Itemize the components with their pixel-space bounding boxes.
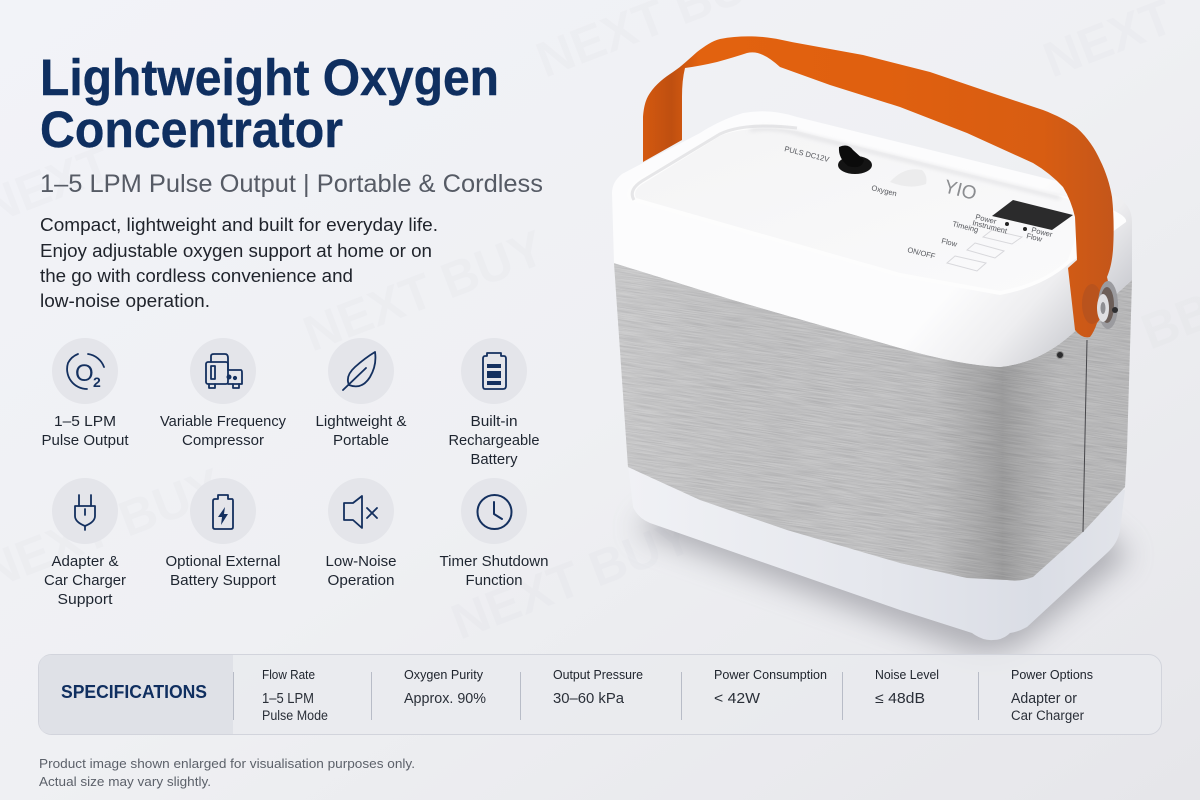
- spec: flow rate: [262, 667, 328, 723]
- spec: power options: Car Charger: [1011, 708, 1084, 723]
- title: Lightweight Oxygen: [40, 49, 499, 106]
- lid labels: [784, 144, 1054, 261]
- icon: oxygen: 2: [93, 374, 101, 390]
- icon: feather: [343, 352, 375, 390]
- footnote: Product image shown enlarged for visualisation purposes only.: [39, 756, 415, 771]
- feature: external battery: [166, 478, 280, 589]
- icon: plug: [75, 495, 95, 530]
- description: the go with cordless convenience and: [40, 266, 353, 286]
- lid labels: ON/OFF: [907, 245, 937, 261]
- feature: low noise: Operation: [328, 572, 394, 589]
- feature: low noise: [326, 478, 396, 589]
- feature: rechargeable battery: Rechargeable: [448, 432, 540, 449]
- specifications panel: [38, 654, 1162, 734]
- feature: external battery: Optional External: [166, 553, 280, 570]
- lid labels: Timeing: [952, 219, 979, 234]
- spec: flow rate: Flow Rate: [262, 667, 315, 682]
- spec: power consumption: < 42W: [714, 691, 760, 707]
- lid top: [627, 124, 1126, 295]
- product: oxygen concentrator: [612, 36, 1134, 654]
- strap rivet: [1082, 281, 1118, 329]
- description: Compact, lightweight and built for everyday life.: [40, 215, 438, 235]
- feature: compressor: [160, 338, 286, 449]
- spec: power options: Adapter or: [1011, 691, 1077, 707]
- icon: battery: [483, 353, 506, 389]
- footnote: [39, 756, 415, 789]
- product base: [628, 465, 1125, 640]
- description: low-noise operation.: [40, 291, 210, 311]
- footnote: Actual size may vary slightly.: [39, 774, 211, 789]
- carry handle: [643, 36, 1114, 337]
- feature: lightweight: Lightweight &: [316, 413, 406, 430]
- description: [40, 215, 438, 311]
- feature: timer: Timer Shutdown: [440, 553, 548, 570]
- lid labels: Power: [1031, 225, 1054, 239]
- feature: lightweight: Portable: [333, 432, 389, 449]
- feature: adapter and car charger: Car Charger: [44, 572, 126, 589]
- feature: adapter and car charger: Support: [58, 591, 113, 608]
- spec: output pressure: 30–60 kPa: [553, 691, 625, 707]
- icon: clock: [478, 495, 512, 529]
- icon: oxygen: O: [75, 360, 94, 387]
- feature: pulse output: 1–5 LPM: [54, 413, 116, 430]
- subtitle: 1–5 LPM Pulse Output | Portable & Cordless: [40, 170, 543, 198]
- spec: output pressure: Output Pressure: [553, 667, 643, 682]
- spec: oxygen purity: Approx. 90%: [404, 691, 486, 707]
- product shadow: [635, 480, 1130, 653]
- spec: power consumption: Power Consumption: [714, 667, 827, 682]
- feature: compressor: Compressor: [182, 432, 264, 449]
- title: [40, 49, 499, 158]
- icon: battery bolt: [213, 495, 233, 529]
- feature: compressor: Variable Frequency: [160, 413, 286, 430]
- feature: timer: Function: [466, 572, 522, 589]
- feature: adapter and car charger: Adapter &: [52, 553, 118, 570]
- lid labels: Oxygen: [871, 183, 898, 198]
- feature: rechargeable battery: Battery: [470, 451, 518, 468]
- feature: external battery: Battery Support: [170, 572, 277, 589]
- spec: output pressure: [553, 667, 643, 707]
- feature: adapter and car charger: [44, 478, 126, 608]
- lid labels: PULS DC12V: [784, 144, 830, 164]
- title: Concentrator: [40, 101, 343, 158]
- spec: oxygen purity: Oxygen Purity: [404, 667, 483, 682]
- spec: power options: Power Options: [1011, 667, 1093, 682]
- feature: pulse output: [42, 338, 129, 449]
- lid labels: Power: [975, 212, 998, 226]
- white upper body: [612, 111, 1132, 367]
- feature: lightweight: [316, 338, 406, 449]
- icon: oxygen: [67, 354, 104, 390]
- lid labels: Flow: [941, 236, 959, 249]
- feature: rechargeable battery: [448, 338, 540, 468]
- spec: power options: [1011, 667, 1093, 723]
- spec: flow rate: Pulse Mode: [262, 708, 328, 723]
- lid labels: Instrument: [972, 218, 1009, 236]
- watermarks: NEXT BUY: [296, 219, 552, 362]
- lid labels: Flow: [1026, 231, 1044, 244]
- spec: noise level: [875, 667, 939, 707]
- outlet knob: [838, 146, 872, 174]
- feature: rechargeable battery: Built-in: [470, 413, 518, 430]
- icon: compressor: [206, 354, 242, 388]
- heading: SPECIFICATIONS: [61, 682, 207, 702]
- spec: flow rate: 1–5 LPM: [262, 691, 314, 707]
- description: Enjoy adjustable oxygen support at home or on: [40, 241, 432, 261]
- feature: low noise: Low-Noise: [326, 553, 396, 570]
- spec: noise level: Noise Level: [875, 667, 939, 682]
- display: [992, 200, 1073, 230]
- icon: muted speaker: [344, 496, 377, 528]
- spec: oxygen purity: [404, 667, 486, 707]
- fabric sleeve: [614, 263, 1132, 581]
- feature: timer: [440, 478, 548, 589]
- oxygen outlet: [890, 169, 926, 187]
- control buttons: [947, 230, 1022, 271]
- feature: pulse output: Pulse Output: [42, 432, 129, 449]
- watermarks: NEXT BUY: [444, 507, 700, 650]
- spec: power consumption: [714, 667, 827, 707]
- lid labels: YIO: [942, 176, 979, 205]
- spec: noise level: ≤ 48dB: [875, 691, 925, 707]
